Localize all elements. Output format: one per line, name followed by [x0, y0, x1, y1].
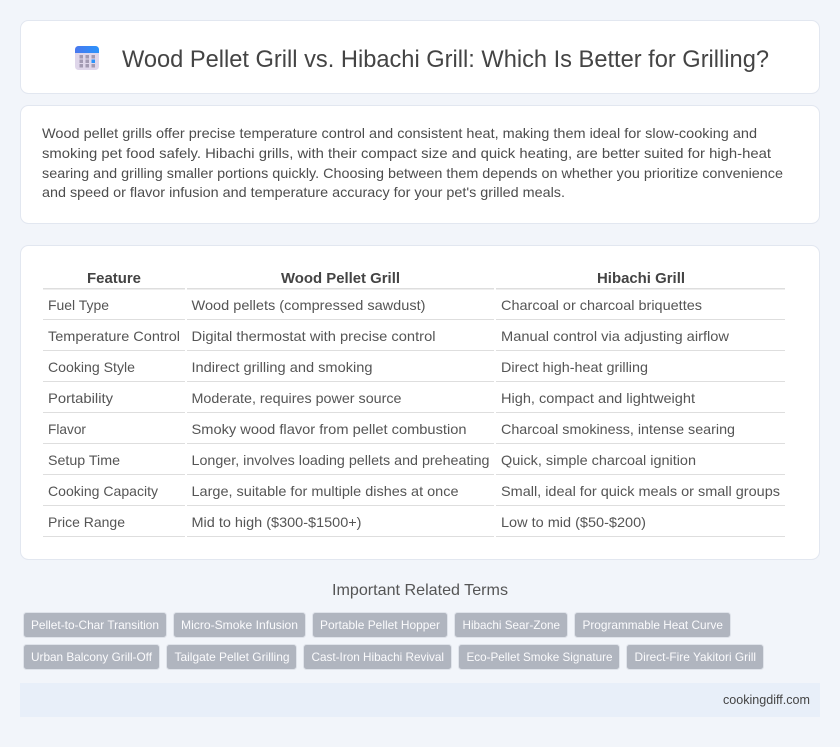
table header row	[87, 270, 685, 287]
panel: related term tags: Micro-Smoke Infusion	[181, 618, 298, 632]
row: setup time: Longer, involves loading pellets and preheating	[192, 452, 490, 468]
panel: related term tags: Cast-Iron Hibachi Revival	[312, 650, 444, 664]
row: flavor: Smoky wood flavor from pellet combustion	[192, 421, 466, 437]
panel: related term tags	[24, 612, 764, 670]
row: portability: High, compact and lightweight	[501, 390, 695, 406]
row: temperature control: Manual control via adjusting airflow	[501, 328, 730, 344]
text block: summary paragraph: smoking pet food safely. Hibachi grills, with their compact size and quick heating, are better suited for high-heat	[42, 145, 771, 161]
row: cooking style: Cooking Style	[48, 359, 135, 375]
row: fuel type: Wood pellets (compressed sawdust)	[192, 297, 426, 313]
row: cooking capacity: Cooking Capacity	[48, 483, 158, 499]
row: price range: Price Range	[48, 514, 125, 530]
row: price range: Low to mid ($50-$200)	[501, 514, 646, 530]
footer bar	[20, 683, 820, 717]
text block: summary paragraph: and speed or flavor infusion and temperature accuracy for your pet's grilled meals.	[42, 184, 565, 200]
panel: related term tags: Pellet-to-Char Transition	[31, 618, 159, 632]
table header row: Hibachi Grill	[597, 270, 685, 287]
row: temperature control: Temperature Control	[48, 328, 180, 344]
row: cooking style: Direct high-heat grilling	[501, 359, 648, 375]
row: cooking style	[48, 359, 648, 375]
row: flavor	[48, 421, 735, 437]
panel: related term tags: Urban Balcony Grill-Off	[31, 650, 153, 664]
row: flavor: Charcoal smokiness, intense searing	[501, 421, 735, 437]
panel: related term tags: Tailgate Pellet Grilling	[174, 650, 290, 664]
panel: title card	[20, 20, 820, 94]
row: cooking style: Indirect grilling and smoking	[192, 359, 372, 375]
row: cooking capacity: Large, suitable for multiple dishes at once	[192, 483, 459, 499]
panel: comparison table	[20, 246, 820, 560]
row: setup time	[48, 452, 696, 468]
row: temperature control: Digital thermostat with precise control	[192, 328, 436, 344]
row: setup time: Setup Time	[48, 452, 120, 468]
row: portability: Moderate, requires power source	[192, 390, 402, 406]
panel: related term tags: Programmable Heat Curve	[582, 618, 723, 632]
row: cooking capacity: Small, ideal for quick meals or small groups	[501, 483, 780, 499]
heading: related terms: Important Related Terms	[332, 582, 508, 599]
panel: related term tags: Hibachi Sear-Zone	[462, 618, 560, 632]
row: cooking capacity	[48, 483, 780, 499]
row: setup time: Quick, simple charcoal ignition	[501, 452, 696, 468]
title: Wood Pellet Grill vs. Hibachi Grill: Which Is Better for Grilling?	[122, 46, 769, 73]
row: portability	[48, 390, 695, 406]
text block: summary paragraph: Wood pellet grills offer precise temperature control and consistent heat, making them ideal for slow-cooking and	[42, 125, 757, 141]
text block: summary paragraph	[42, 125, 783, 200]
table header row: Feature	[87, 270, 141, 287]
row: portability: Portability	[48, 390, 113, 406]
icon: calendar	[75, 46, 99, 70]
panel: related term tags: Direct-Fire Yakitori Grill	[634, 650, 756, 664]
table header row: Wood Pellet Grill	[281, 270, 400, 287]
row: price range: Mid to high ($300-$1500+)	[192, 514, 362, 530]
row: temperature control	[48, 328, 730, 344]
row: fuel type	[48, 297, 702, 313]
row: flavor: Flavor	[48, 421, 86, 437]
panel: introduction	[20, 106, 820, 224]
panel: related term tags: Portable Pellet Hopper	[320, 618, 440, 632]
row: price range	[48, 514, 646, 530]
footer source text: cookingdiff.com	[723, 692, 810, 707]
row: fuel type: Charcoal or charcoal briquettes	[501, 297, 702, 313]
text block: summary paragraph: searing and grilling smaller portions quickly. Choosing between them depends on whether you prioritize convenience	[42, 165, 783, 181]
row: fuel type: Fuel Type	[48, 297, 109, 313]
panel: related term tags: Eco-Pellet Smoke Signature	[466, 650, 613, 664]
